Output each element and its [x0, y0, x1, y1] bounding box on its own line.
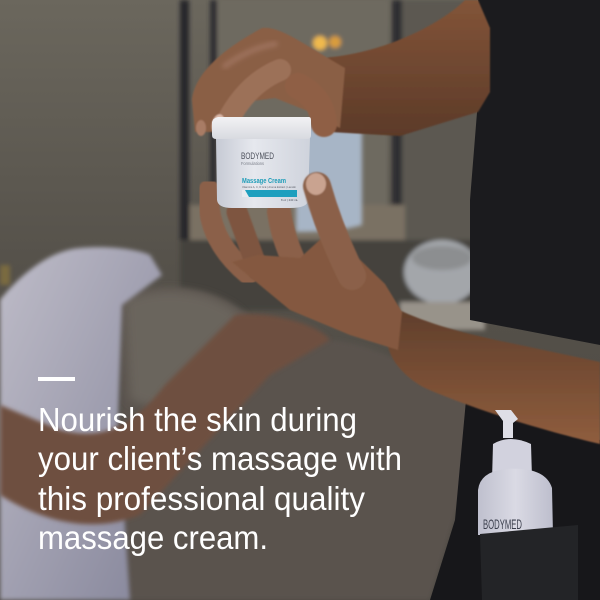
caption text: Nourish the skin during: [38, 401, 357, 438]
therapist upper arm and hand holding lid: [192, 0, 490, 136]
grey towel: [120, 287, 470, 600]
apron pocket: [480, 525, 578, 600]
therapist black top and trousers: [430, 0, 600, 600]
palm: [232, 235, 402, 350]
thumb: [317, 186, 352, 276]
caption text: massage cream.: [38, 519, 268, 556]
caption text: [38, 401, 402, 556]
middle finger: [226, 70, 280, 124]
forearm: [386, 308, 600, 444]
jar teal band: [242, 190, 297, 197]
blurred spare jar behind: [296, 125, 362, 232]
pillow: [0, 247, 162, 600]
jar sub-brand: Formulations: [241, 161, 265, 166]
thumb: [298, 86, 324, 124]
caption text: this professional quality: [38, 480, 365, 517]
caption accent rule: [38, 377, 75, 381]
bottle brand name: BODYMED: [483, 516, 522, 532]
thumbnail: [306, 173, 326, 195]
client lying on massage table: [0, 247, 470, 600]
knuckle highlight: [225, 44, 275, 66]
forearm: [320, 0, 490, 136]
pump bottle in apron pocket: [478, 410, 578, 600]
therapist lower hand and forearm: [232, 173, 600, 444]
client arm: [0, 314, 330, 524]
jar brand name: BODYMED: [241, 151, 274, 162]
fingernails: [210, 113, 226, 135]
caption text: your client’s massage with: [38, 440, 402, 477]
jar product name: Massage Cream: [242, 178, 286, 185]
jar tagline: Vitamins A, C, D & E | Aroma Extract | Lanolin: [242, 185, 296, 189]
back of hand: [192, 28, 345, 132]
lower hand fingers behind jar: [209, 190, 298, 274]
massage cream jar: [212, 117, 311, 208]
jar weight: 8 oz | 240 mL: [281, 198, 298, 202]
